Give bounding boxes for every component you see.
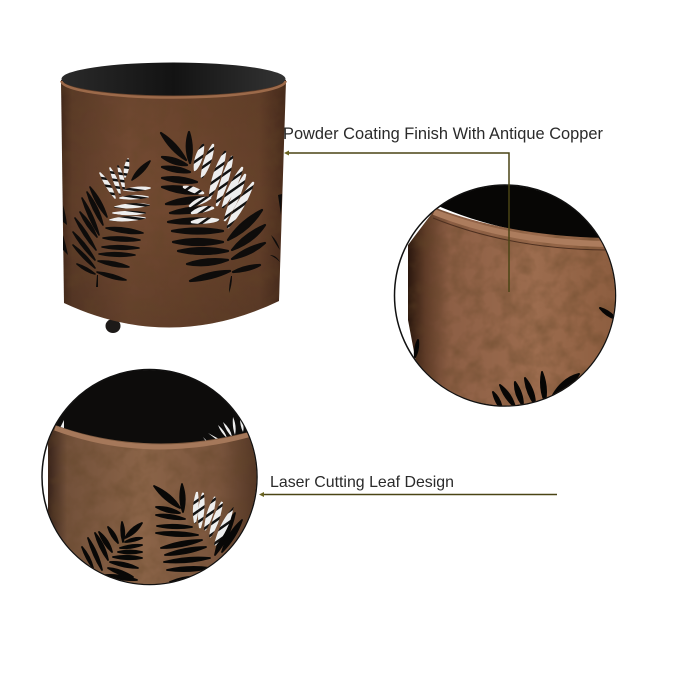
rim band xyxy=(55,428,248,447)
side leaf cutouts xyxy=(63,194,282,262)
callout line xyxy=(263,494,557,496)
white leaf tips in interior xyxy=(60,417,244,443)
planter opening xyxy=(62,62,286,96)
copper surface xyxy=(408,208,620,410)
arrow head xyxy=(259,492,264,497)
small leaf cutout xyxy=(73,159,150,287)
planter rim xyxy=(62,81,286,98)
callout label: Laser Cutting Leaf Design xyxy=(270,474,454,491)
callout label: Powder Coating Finish With Antique Copper xyxy=(283,125,603,143)
rim band xyxy=(434,212,606,244)
callout: laser cutting leaf design xyxy=(259,474,557,497)
circle outline and interior xyxy=(394,185,616,406)
cut leaf tips xyxy=(415,308,616,410)
planter foot xyxy=(106,319,120,333)
arrow head xyxy=(284,150,289,156)
large leaf cutout xyxy=(161,132,265,293)
detail circle: leaf cutting xyxy=(40,366,262,590)
copper surface xyxy=(48,425,262,590)
planter body xyxy=(61,80,286,328)
dark interior xyxy=(440,186,600,241)
circle outline and interior xyxy=(42,370,257,584)
callout line: powder coating finish xyxy=(284,150,509,292)
leaf cutouts xyxy=(82,484,242,582)
detail circle: copper finish xyxy=(394,180,620,410)
dark interior xyxy=(56,370,246,444)
product photo: copper planter xyxy=(60,60,288,340)
